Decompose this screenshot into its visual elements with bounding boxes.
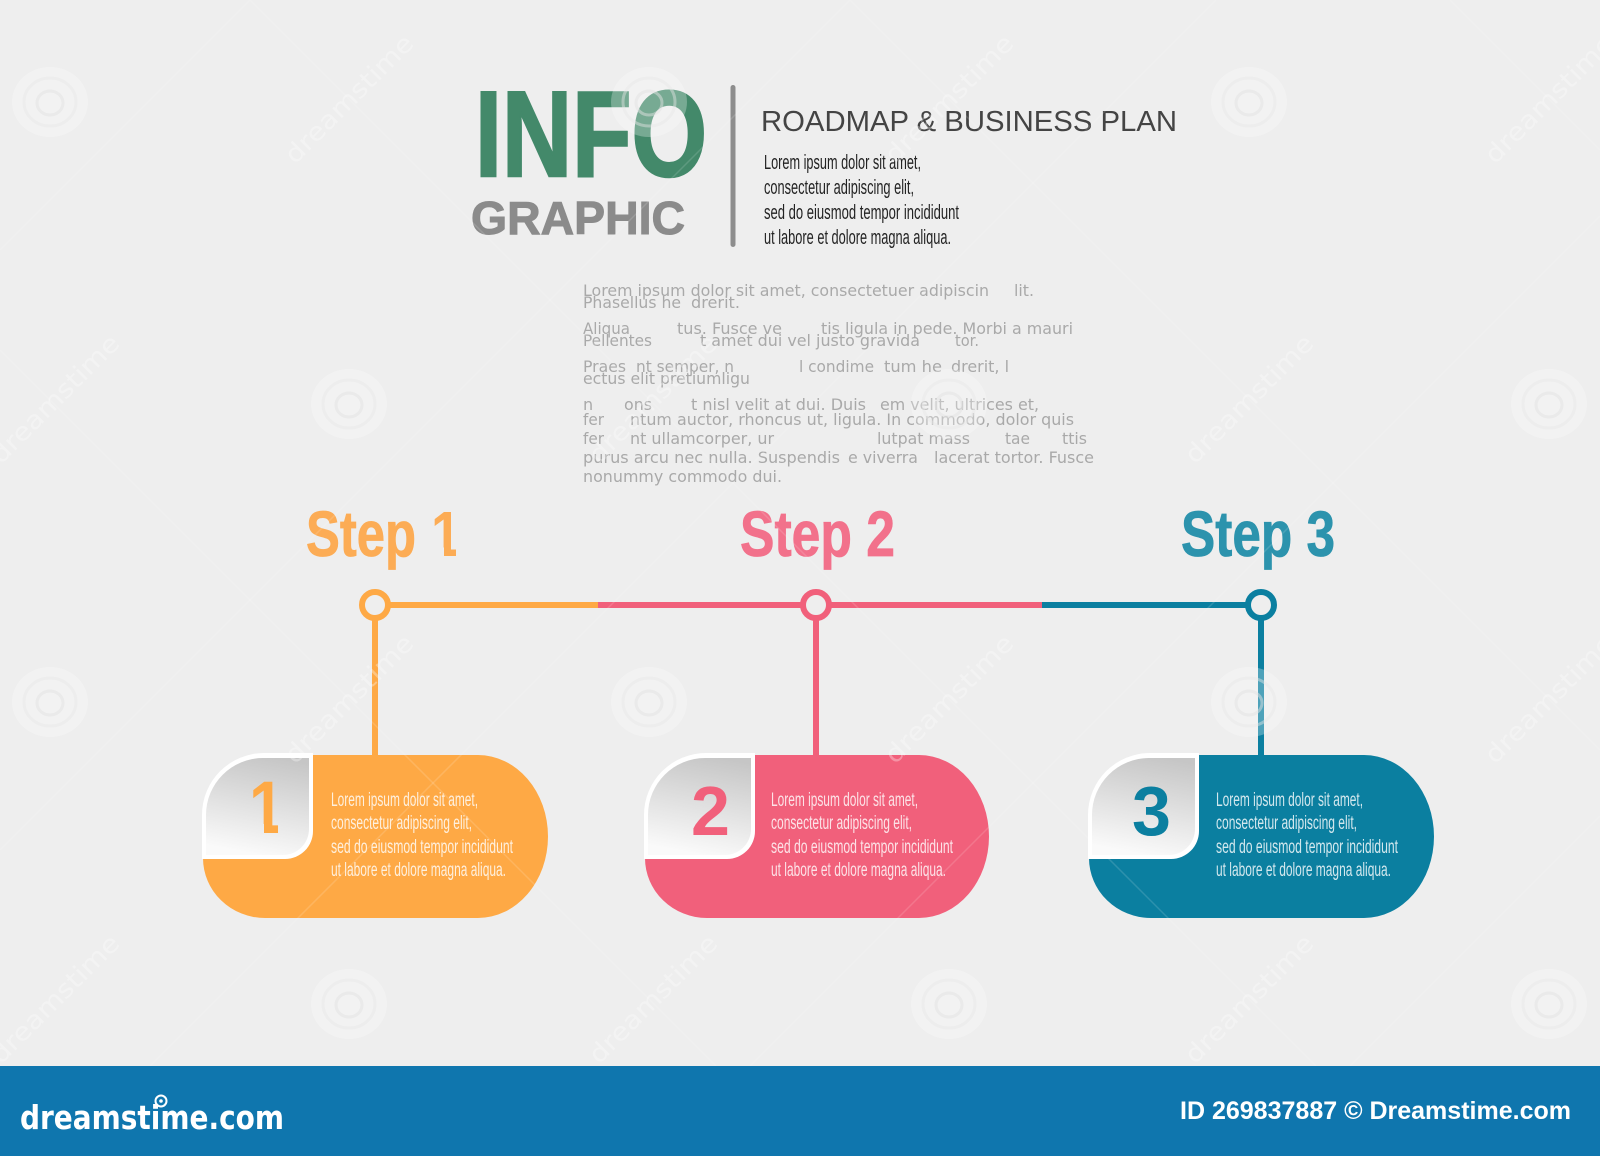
grey body paragraph: ttis — [1062, 429, 1087, 448]
subtitle: GRAPHIC: GRAPHIC — [471, 192, 685, 244]
header intro text: ut labore et dolore magna aliqua. — [764, 227, 951, 249]
watermark overlay: dreamstime — [1179, 929, 1319, 1069]
panel: step 3 card — [1088, 753, 1434, 918]
step 3 text — [1216, 790, 1398, 881]
grey body paragraph: em velit, ultrices et, — [880, 395, 1039, 414]
grey body paragraph: Aliqua — [583, 319, 630, 338]
grey body paragraph: fer — [583, 429, 604, 448]
step 1 connector and node — [362, 592, 388, 755]
watermark overlay: dreamstime — [279, 29, 419, 169]
grey body paragraph: tus. Fusce ve — [677, 319, 782, 338]
grey body paragraph: nt ullamcorper, ur — [630, 429, 774, 448]
header divider — [730, 85, 736, 247]
step 1 text: consectetur adipiscing elit, — [331, 813, 472, 834]
step 3 text: consectetur adipiscing elit, — [1216, 813, 1357, 834]
header intro text — [764, 152, 959, 249]
grey body paragraph: tis ligula in pede. Morbi a mauri — [821, 319, 1073, 338]
grey body paragraph: drerit, l — [951, 357, 1009, 376]
grey body paragraph: lit. — [1014, 281, 1034, 300]
grey body paragraph: tor. — [955, 331, 979, 350]
grey body paragraph: t amet dui vel justo gravida — [700, 331, 920, 350]
header intro text: consectetur adipiscing elit, — [764, 177, 914, 199]
grey body paragraph: ons — [624, 395, 652, 414]
grey body paragraph: ntum auctor, rhoncus ut, ligula. In commodo, dolor quis — [630, 410, 1074, 429]
step 3 text: Lorem ipsum dolor sit amet, — [1216, 790, 1363, 811]
watermark overlay: dreamstime — [583, 329, 723, 469]
footer band — [0, 1066, 1600, 1156]
number 1: 1 — [249, 766, 284, 849]
heading: Step 1: 1 — [431, 498, 461, 570]
panel: step 1 card — [202, 753, 548, 918]
watermark overlay: dreamstime — [879, 629, 1019, 769]
heading: Step 1: Step — [306, 498, 416, 570]
footer logo: dreamstime.com — [20, 1098, 284, 1137]
step 2 connector and node — [803, 592, 829, 755]
watermark overlay: dreamstime — [279, 629, 419, 769]
step 2 text: ut labore et dolore magna aliqua. — [771, 860, 946, 881]
watermark overlay: dreamstime — [583, 929, 723, 1069]
step 1 text: sed do eiusmod tempor incididunt — [331, 837, 513, 858]
step 1 text: ut labore et dolore magna aliqua. — [331, 860, 506, 881]
header intro text: sed do eiusmod tempor incididunt — [764, 202, 959, 224]
step 2 text: consectetur adipiscing elit, — [771, 813, 912, 834]
grey body paragraph: e viverra — [848, 448, 918, 467]
step 1 text: Lorem ipsum dolor sit amet, — [331, 790, 478, 811]
grey body paragraph: n — [583, 395, 593, 414]
watermark overlay: dreamstime — [879, 29, 1019, 169]
timeline connector — [375, 602, 1261, 608]
number 2: 2 — [691, 772, 730, 850]
grey body paragraph: drerit. — [691, 293, 740, 312]
watermark overlay: dreamstime — [1179, 329, 1319, 469]
grey body paragraph: purus arcu nec nulla. Suspendis — [583, 448, 840, 467]
footer image id credit: ID 269837887 © Dreamstime.com — [1180, 1097, 1571, 1125]
grey body paragraph: nonummy commodo dui. — [583, 467, 782, 486]
grey body paragraph: Phasellus he — [583, 293, 681, 312]
grey body paragraph: nt semper, n — [636, 357, 734, 376]
heading: Step 3: Step 3 — [1181, 498, 1335, 570]
step 2 text: Lorem ipsum dolor sit amet, — [771, 790, 918, 811]
title: INFO: INFO — [475, 66, 707, 202]
grey body paragraph: Praes — [583, 357, 626, 376]
number 3: 3 — [1132, 772, 1171, 850]
grey body paragraph: l condime — [799, 357, 874, 376]
panel: step 2 card — [644, 753, 989, 918]
grey body paragraph: lacerat tortor. Fusce — [934, 448, 1094, 467]
step 3 connector and node — [1248, 592, 1274, 755]
grey body paragraph: fer — [583, 410, 604, 429]
header: INFO GRAPHIC logotype — [471, 66, 707, 244]
grey body paragraph: ectus elit pretiumligu — [583, 369, 750, 388]
grey body paragraph — [583, 281, 1094, 486]
step 3 text: sed do eiusmod tempor incididunt — [1216, 837, 1398, 858]
step 1 text — [331, 790, 513, 881]
step 2 text — [771, 790, 953, 881]
heading: roadmap and business plan: ROADMAP & BUSINESS PLAN — [761, 106, 1177, 138]
grey body paragraph: Lorem ipsum dolor sit amet, consectetuer adipiscin — [583, 281, 989, 300]
grey body paragraph: Pellentes — [583, 331, 652, 350]
grey body paragraph: lutpat mass — [877, 429, 970, 448]
heading: Step 2: Step 2 — [740, 498, 895, 570]
step 3 text: ut labore et dolore magna aliqua. — [1216, 860, 1391, 881]
step 2 text: sed do eiusmod tempor incididunt — [771, 837, 953, 858]
header intro text: Lorem ipsum dolor sit amet, — [764, 152, 921, 174]
grey body paragraph: tum he — [884, 357, 942, 376]
grey body paragraph: t nisl velit at dui. Duis — [691, 395, 866, 414]
grey body paragraph: tae — [1005, 429, 1030, 448]
